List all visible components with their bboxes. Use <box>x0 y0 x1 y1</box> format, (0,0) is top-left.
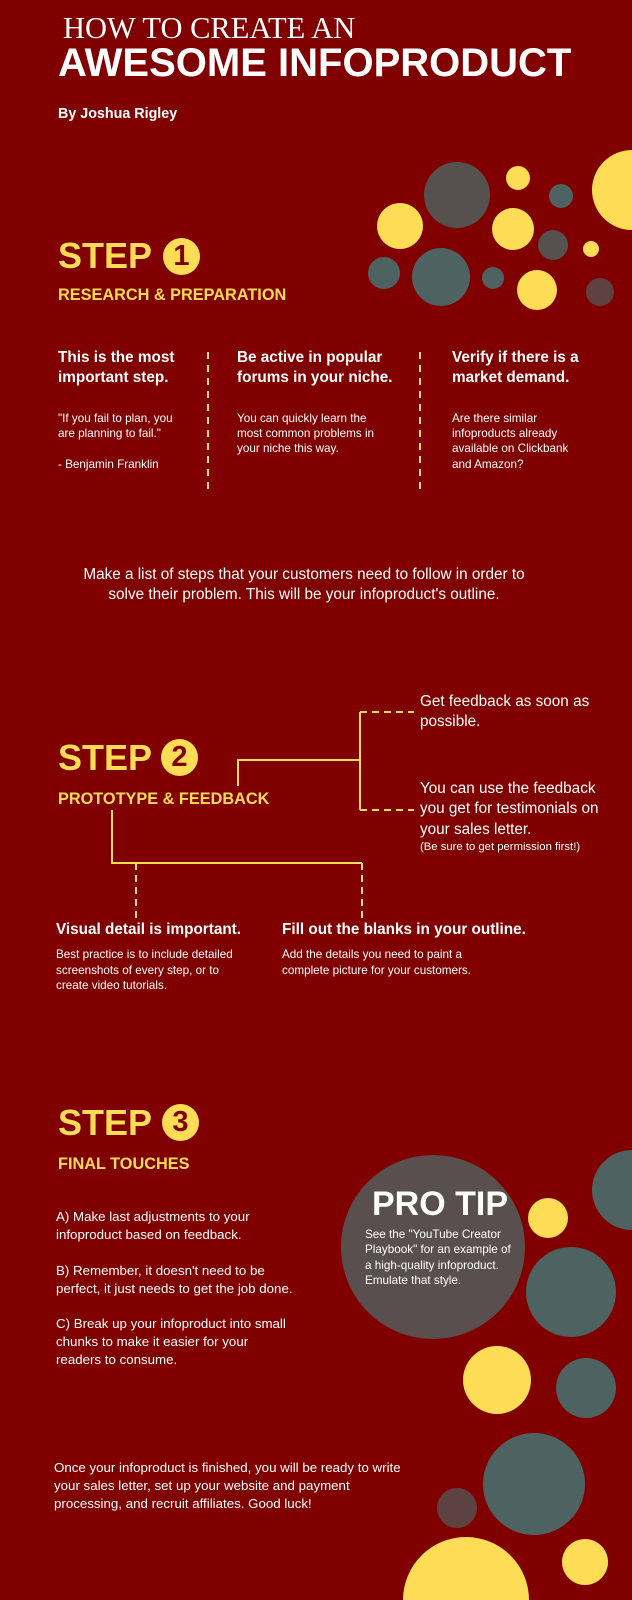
column: forums: your niche this way. <box>237 442 339 455</box>
feedback notes <box>420 693 589 730</box>
column: market demand: infoproducts already <box>452 427 557 440</box>
fill out blanks <box>282 921 526 977</box>
visual detail: Best practice is to include detailed <box>56 948 233 961</box>
step 2 heading: 2 <box>171 741 188 773</box>
closing paragraph: Once your infoproduct is finished, you will be ready to write <box>54 1460 401 1475</box>
text: your sales letter. <box>420 821 531 838</box>
closing paragraph: processing, and recruit affiliates. Good luck! <box>54 1496 312 1511</box>
column: market demand <box>452 349 579 471</box>
feedback notes: possible. <box>420 713 480 730</box>
text: you get for testimonials on <box>420 800 599 817</box>
title: AWESOME INFOPRODUCT <box>58 41 571 85</box>
pro tip circle: PRO TIP <box>372 1185 508 1223</box>
step 1 heading <box>58 235 286 304</box>
dividers step 1 <box>207 352 421 489</box>
visual detail: Visual detail is important. <box>56 921 241 938</box>
final touches list <box>56 1209 293 1367</box>
column: important step: This is the most <box>58 349 174 366</box>
column: forums: You can quickly learn the <box>237 412 367 425</box>
final touches list: B) Remember, it doesn't need to be <box>56 1263 265 1278</box>
title: HOW TO CREATE AN <box>63 11 355 45</box>
step 1 heading: STEP <box>58 235 152 276</box>
column: forums: most common problems in <box>237 427 374 440</box>
pro tip circle <box>341 1155 525 1339</box>
pro tip circle: Emulate that style. <box>365 1274 461 1287</box>
final touches list: infoproduct based on feedback. <box>56 1227 242 1242</box>
column: market demand: available on Clickbank <box>452 442 568 455</box>
title <box>58 11 571 85</box>
column: forums: forums in your niche. <box>237 369 393 386</box>
author: By Joshua Rigley <box>58 106 177 122</box>
step 3 heading: FINAL TOUCHES <box>58 1155 189 1173</box>
visual detail: create video tutorials. <box>56 979 167 992</box>
final touches list: C) Break up your infoproduct into small <box>56 1316 286 1331</box>
column: market demand: market demand. <box>452 369 569 386</box>
step 1 heading: RESEARCH & PREPARATION <box>58 286 286 304</box>
visual detail: screenshots of every step, or to <box>56 964 219 977</box>
column: forums <box>237 349 393 455</box>
feedback notes: Get feedback as soon as <box>420 693 589 710</box>
connectors step 2 <box>111 711 414 918</box>
column: important step: - Benjamin Franklin <box>58 458 159 471</box>
column: important step: important step. <box>58 369 168 386</box>
column: important step: are planning to fail." <box>58 427 161 440</box>
pro tip circle: a high-quality infoproduct. <box>365 1259 499 1272</box>
step 1 heading: 1 <box>173 240 190 272</box>
step 3 heading: 3 <box>172 1106 189 1138</box>
closing paragraph: your sales letter, set up your website and payment <box>54 1478 350 1493</box>
column: market demand: and Amazon? <box>452 458 523 471</box>
text: You can use the feedback <box>420 780 596 797</box>
outline paragraph <box>83 566 525 603</box>
text: (Be sure to get permission first!) <box>420 841 580 853</box>
step 2 heading: PROTOTYPE & FEEDBACK <box>58 790 269 808</box>
column: important step: "If you fail to plan, you <box>58 412 173 425</box>
outline paragraph: Make a list of steps that your customers need to follow in order to <box>83 566 525 583</box>
pro tip circle: See the "YouTube Creator <box>365 1228 501 1241</box>
step 3 heading <box>58 1102 199 1173</box>
final touches list: readers to consume. <box>56 1352 177 1367</box>
outline paragraph: solve their problem. This will be your infoproduct's outline. <box>108 586 500 603</box>
pro tip circle: Playbook" for an example of <box>365 1243 511 1256</box>
visual detail <box>56 921 241 992</box>
fill out blanks: Fill out the blanks in your outline. <box>282 921 526 938</box>
column: forums: Be active in popular <box>237 349 382 366</box>
fill out blanks: complete picture for your customers. <box>282 964 471 977</box>
column: important step <box>58 349 174 471</box>
step 2 heading <box>58 737 270 808</box>
final touches list: chunks to make it easier for your <box>56 1334 248 1349</box>
column: market demand: Verify if there is a <box>452 349 579 366</box>
final touches list: A) Make last adjustments to your <box>56 1209 250 1224</box>
column: market demand: Are there similar <box>452 412 537 425</box>
step 3 heading: STEP <box>58 1102 152 1143</box>
step 2 heading: STEP <box>58 737 152 778</box>
fill out blanks: Add the details you need to paint a <box>282 948 462 961</box>
final touches list: perfect, it just needs to get the job done. <box>56 1281 293 1296</box>
closing paragraph <box>54 1460 401 1511</box>
